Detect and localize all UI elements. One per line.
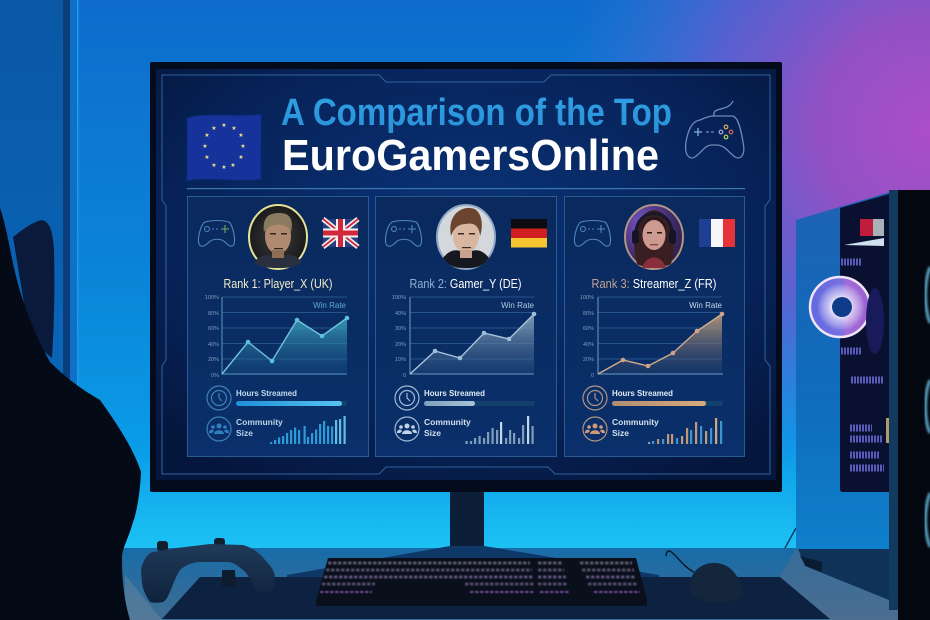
icon: UK flag xyxy=(323,219,358,247)
icon: EU flag: ★ xyxy=(240,143,246,150)
icon: gamepad xyxy=(574,220,611,246)
hours streamed bar xyxy=(424,388,535,406)
win rate chart: 0 xyxy=(403,373,406,379)
icon: community xyxy=(395,417,419,441)
community size: Size xyxy=(424,428,441,438)
community size: Community xyxy=(236,417,283,427)
win rate chart: 100% xyxy=(580,295,594,301)
cables xyxy=(785,528,889,548)
avatar: Gamer_Y xyxy=(437,205,495,269)
icon: EU flag xyxy=(187,114,261,181)
icon: EU flag: ★ xyxy=(204,132,210,139)
rank label: Rank 2: Gamer_Y (DE) xyxy=(410,277,522,291)
chair wing xyxy=(13,220,54,358)
win rate chart: 30% xyxy=(395,326,406,332)
win rate chart: 0 xyxy=(591,373,594,379)
gaming chair xyxy=(0,208,141,620)
keyboard xyxy=(316,558,647,606)
computer mouse xyxy=(666,551,743,602)
icon: EU flag: ★ xyxy=(230,162,236,169)
monitor bezel xyxy=(150,62,782,492)
interior components xyxy=(841,219,889,468)
win rate chart xyxy=(392,295,536,379)
icon: EU flag: ★ xyxy=(202,143,208,150)
icon: EU flag: ★ xyxy=(211,162,217,169)
community size: Size xyxy=(236,428,253,438)
title xyxy=(281,92,672,180)
win rate chart: 100% xyxy=(205,295,219,301)
win rate chart: Win Rate xyxy=(501,301,535,310)
front fan rings xyxy=(926,267,930,547)
icon: EU flag: ★ xyxy=(204,154,210,161)
rank label: Rank 3: Streamer_Z (FR) xyxy=(592,277,716,291)
game controller on desk xyxy=(141,538,275,603)
PC tower xyxy=(796,190,930,620)
icon: clock xyxy=(583,386,607,410)
win rate chart: 10% xyxy=(395,357,406,363)
monitor screen xyxy=(156,69,776,480)
monitor stand xyxy=(287,490,659,584)
community size: Size xyxy=(612,428,629,438)
win rate chart: 20% xyxy=(208,357,219,363)
panel: Player_X xyxy=(188,196,368,456)
win rate chart xyxy=(580,295,724,379)
community size xyxy=(612,417,722,444)
win rate chart: 20% xyxy=(583,357,594,363)
win rate chart: 0% xyxy=(211,373,219,379)
icon: EU flag: ★ xyxy=(221,164,227,171)
hours streamed bar xyxy=(236,388,347,406)
icon: EU flag: ★ xyxy=(231,125,237,132)
win rate chart xyxy=(205,295,349,379)
win rate chart: 20% xyxy=(395,342,406,348)
win rate chart: Win Rate xyxy=(313,301,347,310)
monitor xyxy=(150,62,782,492)
icon: clock xyxy=(395,386,419,410)
win rate chart: 40% xyxy=(583,342,594,348)
tower front xyxy=(889,190,899,610)
icon: EU flag: ★ xyxy=(211,125,217,132)
icon: community xyxy=(207,417,231,441)
tower interior xyxy=(840,194,889,492)
icon: EU flag: ★ xyxy=(221,122,227,129)
desk xyxy=(100,548,930,620)
avatar: Streamer_Z xyxy=(625,205,683,269)
title: EuroGamersOnline xyxy=(282,131,659,180)
panel: Streamer_Z xyxy=(564,196,744,456)
win rate chart: 40% xyxy=(395,311,406,317)
desk mat xyxy=(162,577,830,619)
icon: French flag xyxy=(699,219,735,247)
icon: gamepad xyxy=(385,220,422,246)
win rate chart: 80% xyxy=(208,311,219,317)
tower foot xyxy=(800,556,822,572)
tower bottom xyxy=(798,549,889,600)
icon: header gamepad xyxy=(686,101,744,158)
title: A Comparison of the Top xyxy=(281,92,672,134)
hours streamed bar: Hours Streamed xyxy=(612,388,673,398)
icon: EU flag: ★ xyxy=(238,132,244,139)
community size xyxy=(424,416,534,444)
tower side glass xyxy=(796,192,890,600)
community size: Community xyxy=(424,417,471,427)
win rate chart: 100% xyxy=(392,295,406,301)
community size xyxy=(236,416,346,444)
win rate chart: 40% xyxy=(208,342,219,348)
icon: EU flag: ★ xyxy=(238,154,244,161)
screen frame xyxy=(162,75,770,474)
icon: gamepad xyxy=(198,220,235,246)
hours streamed bar: Hours Streamed xyxy=(236,388,297,398)
hours streamed bar: Hours Streamed xyxy=(424,388,485,398)
win rate chart: Win Rate xyxy=(689,301,723,310)
icon: clock xyxy=(207,386,231,410)
community size: Community xyxy=(612,417,659,427)
win rate chart: 60% xyxy=(208,326,219,332)
title divider xyxy=(187,188,745,189)
icon: community xyxy=(583,417,607,441)
icon: German flag xyxy=(511,219,547,248)
chair body xyxy=(0,208,141,620)
win rate chart: 80% xyxy=(583,311,594,317)
panel: Gamer_Y xyxy=(376,196,556,456)
cooling fan xyxy=(810,277,884,354)
avatar: Player_X xyxy=(249,205,307,269)
rank label: Rank 1: Player_X (UK) xyxy=(224,277,332,291)
hours streamed bar xyxy=(612,388,723,406)
win rate chart: 60% xyxy=(583,326,594,332)
